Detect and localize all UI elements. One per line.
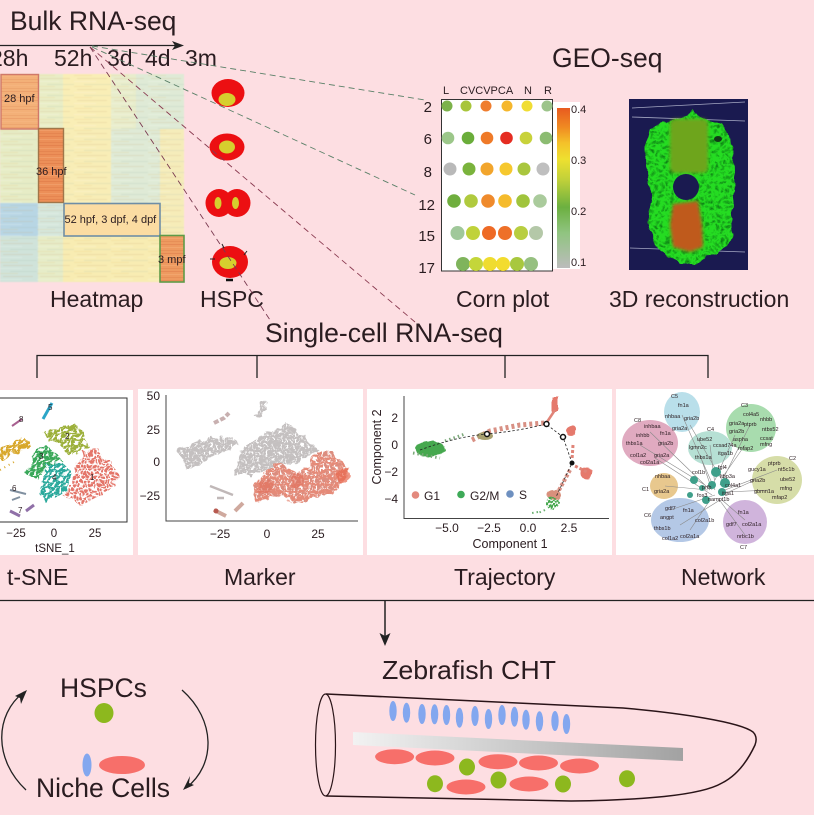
cycle diagram: HSPCs and niche cells: HSPCs: [60, 673, 147, 703]
gray vessel bar: [353, 732, 683, 761]
network gene labels: ptprb: [744, 422, 757, 428]
trajectory axis labels: −2.5: [477, 521, 501, 535]
network gene labels: nt5c1b: [778, 467, 795, 473]
panel: Trajectory plot: [367, 389, 612, 555]
corn plot row labels: 12: [418, 197, 435, 214]
timeline arrow and time labels: 4d: [145, 45, 171, 71]
network cluster names: C2: [789, 456, 796, 462]
network edges: [640, 415, 777, 535]
network gene labels: col2a1a: [640, 460, 660, 466]
corn plot: [418, 85, 552, 277]
network gene labels: gdf7: [726, 522, 737, 528]
network gene labels: gria2b: [658, 441, 673, 447]
trajectory axis labels: 2: [391, 411, 398, 425]
heatmap box: 3 mpf: 3 mpf: [158, 254, 186, 266]
trajectory axis labels: Component 2: [370, 409, 384, 485]
heatmap box: 36 hpf: 36 hpf: [36, 166, 68, 178]
title: Zebrafish CHT: Zebrafish CHT: [382, 655, 556, 685]
corn plot colour scale: 0.2: [571, 206, 586, 218]
network cluster names: C5: [671, 394, 678, 400]
trajectory axis labels: [370, 409, 578, 551]
network gene labels: prfb: [702, 485, 711, 491]
heatmap box: 28 hpf: [1, 74, 38, 129]
tail outline: [326, 694, 756, 801]
trajectory axis labels: −2: [384, 465, 398, 479]
trajectory legend: G2/M: [470, 489, 499, 503]
label: 3D reconstruction: 3D reconstruction: [609, 286, 789, 312]
Marker axis labels: [140, 389, 325, 541]
Marker axis labels: −25: [210, 527, 231, 541]
network gene labels: gbmn1a: [754, 489, 775, 495]
corn plot column labels: N: [524, 85, 532, 97]
network cluster names: C8: [634, 418, 641, 424]
label: Corn plot: Corn plot: [456, 286, 550, 312]
Marker axis labels: 50: [147, 389, 160, 403]
trajectory axis labels: Component 1: [472, 537, 548, 551]
heatmap box: 52 hpf, 3 dpf, 4 dpf: [64, 204, 160, 236]
network cluster names: [634, 394, 796, 551]
timeline arrow and time labels: [0, 41, 217, 71]
network gene labels: mfng: [760, 442, 772, 448]
network gene labels: gucy1a: [748, 467, 767, 473]
network gene labels: fn1a: [683, 508, 695, 514]
corn plot colour scale: [553, 102, 586, 269]
dashed connector lines: [90, 46, 425, 322]
network gene labels: thbs1a: [626, 441, 643, 447]
network gene labels: ptprb: [768, 461, 781, 467]
trajectory legend: S: [519, 488, 527, 502]
t-SNE axis labels: −25: [6, 528, 26, 540]
network centre nodes: [687, 467, 730, 504]
timeline arrow and time labels: 3m: [185, 45, 217, 71]
corn plot column labels: [443, 85, 552, 97]
trajectory points: [413, 398, 592, 513]
green HSPCs: [427, 758, 635, 792]
network gene labels: gdf7: [665, 506, 676, 512]
network gene labels: angpt: [660, 515, 674, 521]
network gene labels: fn1a: [660, 431, 672, 437]
title: GEO-seq: GEO-seq: [552, 43, 662, 73]
corn plot dots: [442, 100, 552, 271]
network gene labels: gria2a: [654, 453, 670, 459]
network gene labels: mfng: [780, 486, 792, 492]
corn plot colour scale: 0.4: [571, 104, 586, 116]
network gene labels: col1a2: [630, 453, 646, 459]
t-SNE cluster numbers: 1: [90, 473, 95, 482]
network gene labels: nrbc1b: [737, 534, 754, 540]
t-SNE cluster numbers: 6: [12, 484, 17, 493]
trajectory axis labels: 2.5: [561, 521, 578, 535]
network gene labels: ccsad74a: [713, 443, 737, 449]
t-SNE cluster numbers: 7: [18, 506, 23, 515]
network gene labels: thbs1a: [695, 455, 712, 461]
salmon niche cells: [375, 749, 599, 794]
network cluster names: C7: [740, 545, 747, 551]
timeline arrow and time labels: 52h: [54, 45, 92, 71]
network cluster ellipses: [622, 392, 802, 544]
network gene labels: gria2a: [654, 489, 670, 495]
trajectory axis labels: −4: [384, 492, 398, 506]
network gene labels: col4a5: [743, 412, 759, 418]
network gene labels: col1a2: [662, 536, 678, 542]
corn plot row labels: 15: [418, 228, 435, 245]
network gene labels: gria2a: [672, 426, 688, 432]
corn plot colour scale: 0.3: [571, 155, 586, 167]
t-SNE axis labels: 0: [51, 528, 57, 540]
network gene labels: itga1: [722, 491, 734, 497]
3D reconstruction image: [629, 99, 748, 270]
heatmap box: 28 hpf: 28 hpf: [4, 93, 36, 105]
network gene labels: lgmn2c: [689, 445, 707, 451]
network gene labels: [626, 403, 795, 542]
trajectory axis labels: 0.0: [520, 521, 537, 535]
t-SNE cluster numbers: 5: [48, 403, 53, 412]
section labels: scRNA panels: Network: [681, 564, 766, 590]
trajectory axis labels: 0: [391, 438, 398, 452]
trajectory legend: [412, 488, 527, 503]
Marker axis labels: 0: [153, 455, 160, 469]
network cluster names: C1: [642, 487, 649, 493]
t-SNE axis labels: 25: [89, 528, 101, 540]
panel: t-SNE plot: [0, 390, 133, 555]
network cluster names: C4: [707, 427, 714, 433]
cycle diagram: HSPCs and niche cells: [2, 673, 208, 803]
corn plot column labels: R: [544, 85, 552, 97]
section labels: scRNA panels: Marker: [224, 564, 296, 590]
label: Heatmap: Heatmap: [50, 286, 143, 312]
network gene labels: gria2b: [750, 478, 765, 484]
trajectory legend: G1: [424, 489, 440, 503]
network gene labels: gria2b: [729, 429, 744, 435]
Marker axis labels: 0: [264, 527, 271, 541]
title: Single-cell RNA-seq: Single-cell RNA-seq: [265, 318, 503, 348]
network gene labels: aspha: [733, 437, 749, 443]
corn plot column labels: CVCVPCA: [460, 85, 514, 97]
trajectory axis labels: −5.0: [435, 521, 459, 535]
t-SNE axis labels: [6, 528, 101, 555]
network gene labels: fos3: [697, 493, 707, 499]
heatmap box: 3 mpf: [158, 236, 186, 282]
network gene labels: ube52: [780, 477, 795, 483]
network gene labels: ltbp3a: [720, 474, 736, 480]
t-SNE cluster numbers: 3: [39, 452, 44, 461]
Marker axis labels: 25: [311, 527, 325, 541]
section labels: scRNA panels: t-SNE: [7, 564, 68, 590]
network cluster names: C6: [644, 513, 651, 519]
network gene labels: col2a1a: [742, 522, 762, 528]
corn plot row labels: 17: [418, 260, 435, 277]
network gene labels: fn1a: [678, 403, 690, 409]
network gene labels: inhbaa: [644, 424, 661, 430]
network gene labels: gria2a: [729, 421, 745, 427]
divider and down arrow: [0, 600, 814, 646]
network gene labels: gria2b: [684, 416, 699, 422]
heatmap: [0, 74, 186, 282]
network gene labels: ccsat: [760, 436, 773, 442]
corn plot row labels: 6: [424, 131, 432, 148]
heatmap box: 36 hpf: [36, 128, 68, 202]
network gene labels: mfap2: [738, 446, 753, 452]
timeline arrow and time labels: 3d: [107, 45, 133, 71]
network gene labels: ntbs52: [762, 427, 779, 433]
t-SNE cluster numbers: 4: [52, 473, 57, 482]
network gene labels: fgl4: [718, 465, 727, 471]
bracket connector: [37, 356, 708, 378]
panel: Marker plot: [138, 389, 363, 555]
t-SNE axis labels: tSNE_1: [35, 543, 75, 555]
network gene labels: col1b: [692, 470, 705, 476]
Marker axis labels: 25: [147, 423, 160, 437]
network gene labels: ube52: [697, 437, 712, 443]
panel: Network plot: [616, 389, 814, 555]
network gene labels: nhbaa: [655, 474, 671, 480]
label: HSPC: HSPC: [200, 286, 264, 312]
Marker axis labels: −25: [140, 489, 160, 503]
network gene labels: nhbb: [760, 417, 772, 423]
section labels: scRNA panels: [7, 564, 766, 590]
network gene labels: col2a1a: [680, 534, 700, 540]
network gene labels: fn1a: [738, 510, 750, 516]
network gene labels: nampt1b: [708, 497, 729, 503]
t-SNE cluster numbers: [12, 403, 95, 515]
network gene labels: col4a1: [725, 483, 741, 489]
t-SNE cluster numbers: 2: [65, 432, 70, 441]
heatmap box: 52 hpf, 3 dpf, 4 dpf: 52 hpf, 3 dpf, 4 dpf: [64, 214, 157, 226]
corn plot row labels: [418, 99, 435, 277]
trajectory path with nodes: [420, 422, 574, 497]
network gene labels: inhbb: [636, 433, 649, 439]
network gene labels: itga1b: [718, 451, 733, 457]
corn plot colour scale: 0.1: [571, 257, 586, 269]
network gene labels: nhbaa: [665, 414, 681, 420]
zebrafish CHT tail diagram: [316, 694, 756, 801]
title: Bulk RNA-seq: Bulk RNA-seq: [10, 6, 176, 36]
t-SNE cluster numbers: 8: [19, 415, 24, 424]
corn plot row labels: 8: [424, 164, 432, 181]
blue cells: [389, 701, 570, 734]
section labels: scRNA panels: Trajectory: [454, 564, 556, 590]
cycle diagram: HSPCs and niche cells: Niche Cells: [36, 773, 170, 803]
corn plot row labels: 2: [424, 99, 432, 116]
network gene labels: mfap2: [772, 495, 787, 501]
network gene labels: col2a1b: [695, 518, 714, 524]
HSPC section icons: [206, 79, 250, 280]
network cluster names: C3: [741, 403, 748, 409]
corn plot column labels: L: [443, 85, 449, 97]
network gene labels: thbs1b: [654, 526, 671, 532]
